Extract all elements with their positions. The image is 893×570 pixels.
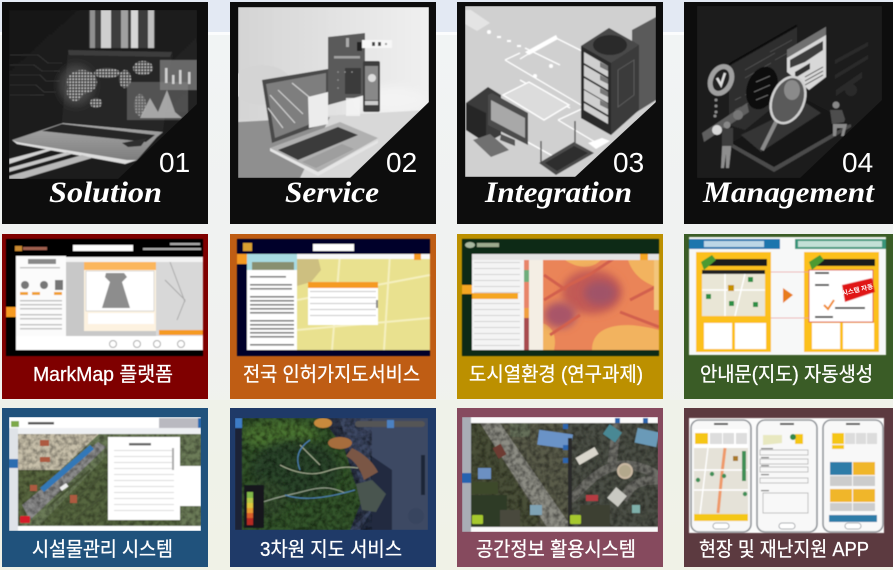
panel: spatial information system [457, 408, 663, 567]
screenshot: MarkMap [6, 239, 203, 356]
heading: Service [285, 176, 379, 209]
screenshot: permit map [237, 239, 430, 356]
panel: 02 Service [230, 2, 436, 224]
number: 04 [842, 147, 873, 178]
panel: urban heat environment [457, 234, 663, 399]
image: laptop with world map [9, 10, 197, 179]
panel: MarkMap platform [2, 234, 208, 399]
screenshot: aerial imagery [462, 417, 659, 532]
corner cut [350, 102, 429, 178]
screenshot: heat map [462, 239, 659, 356]
label: 공간정보 활용시스템 [476, 538, 636, 561]
corner cut [118, 104, 197, 179]
corner cut [800, 100, 882, 178]
corner cut [575, 102, 656, 177]
panel: field and disaster support app [684, 408, 893, 567]
number: 03 [613, 147, 644, 178]
heading: Integration [484, 176, 632, 209]
number: 02 [386, 147, 417, 178]
screenshot: phone apps [689, 418, 884, 533]
screenshot: notice templates [689, 237, 886, 355]
label: 시설물관리 시스템 [32, 538, 173, 561]
label: 안내문(지도) 자동생성 [700, 363, 873, 386]
heading: Solution [49, 176, 162, 209]
label: 전국 인허가지도서비스 [243, 363, 420, 386]
panel: 03 Integration [457, 2, 663, 224]
stamp text: 시스템 자동 [841, 282, 874, 298]
number: 01 [159, 147, 190, 178]
panel: 3D map service [230, 408, 436, 567]
image: laptop and mobile devices [232, 7, 429, 178]
screenshot: 3D terrain [235, 418, 428, 530]
panel: nationwide permit map service [230, 234, 436, 399]
image: isometric magnifier on laptop [697, 6, 882, 178]
image: isometric server and computer [465, 6, 656, 177]
label: MarkMap 플랫폼 [33, 363, 173, 386]
label: 도시열환경 (연구과제) [469, 363, 643, 386]
panel: 04 Management [684, 2, 893, 224]
label: 3차원 지도 서비스 [260, 538, 402, 561]
screenshot: facility system [9, 417, 201, 531]
panel: 01 Solution [2, 2, 208, 224]
panel: auto-generated notice [684, 234, 893, 399]
heading: Management [702, 176, 876, 209]
label: 현장 및 재난지원 APP [699, 538, 869, 561]
panel: facility management [2, 408, 208, 567]
